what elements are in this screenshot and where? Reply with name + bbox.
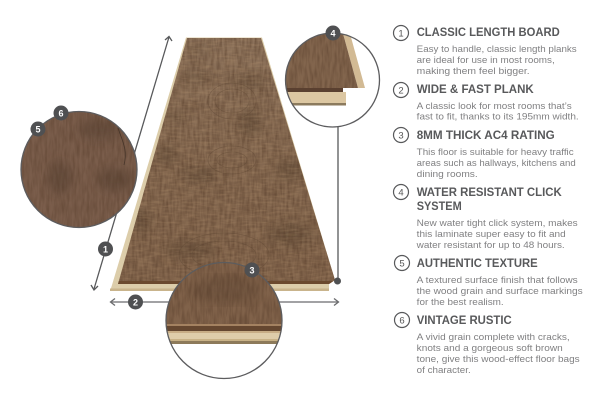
arrow 1: board length: [91, 36, 172, 290]
feature 4: water resistant click system: water resistant for up to 48 hours.: [416, 240, 565, 251]
feature 1: classic length board: 1: [398, 28, 404, 39]
feature 1: classic length board: making them feel bigger.: [417, 66, 530, 77]
feature 3: 8mm thick AC4 rating: 3: [398, 130, 404, 141]
feature 1: classic length board: [394, 25, 577, 77]
feature 6: vintage rustic: of character.: [417, 365, 471, 376]
feature 6: vintage rustic: knots and a gorgeous soft brown: [417, 343, 563, 354]
feature 4: water resistant click system: this laminate super easy to fit and: [417, 229, 566, 240]
badge 6: [54, 106, 68, 120]
feature 3: 8mm thick AC4 rating: This floor is suitable for heavy traffic: [417, 147, 574, 158]
wood top surface: [286, 34, 358, 88]
plank core edge: [110, 38, 335, 291]
tongue: [288, 92, 346, 103]
badge 4: [326, 26, 340, 40]
feature 6: vintage rustic: 6: [399, 315, 405, 326]
feature 5: authentic texture: for the best realism.: [417, 297, 504, 308]
feature 1: classic length board: are ideal for use in most rooms,: [417, 55, 555, 66]
feature 6: vintage rustic: A vivid grain complete with cracks,: [417, 332, 570, 343]
badge 5: [30, 122, 46, 136]
feature 3: 8mm thick AC4 rating: [394, 128, 576, 180]
badge 1: 1: [103, 244, 108, 254]
feature 2: wide and fast plank: fast to fit, thanks to its 195mm width.: [417, 112, 579, 122]
grain arcs: [179, 83, 269, 277]
feature 2: wide and fast plank: 2: [398, 85, 404, 96]
feature 4: water resistant click system: New water tight click system, makes: [417, 218, 578, 229]
badge 2: 2: [133, 297, 138, 307]
magnifier: texture detail: [20, 110, 138, 230]
feature 5: authentic texture: [394, 256, 583, 308]
feature 6: vintage rustic: [394, 312, 580, 376]
feature 5: authentic texture: 5: [399, 258, 405, 269]
leader line from click system to plank corner: [334, 127, 341, 284]
arrow 2: board width: [110, 298, 338, 306]
badge 6: 6: [58, 108, 64, 118]
feature 6: vintage rustic: VINTAGE RUSTIC: [417, 313, 512, 327]
laminate plank: [110, 36, 340, 291]
badge 5: 5: [35, 124, 41, 134]
badge 4: 4: [330, 28, 336, 38]
badge 3: 3: [249, 265, 255, 275]
feature 4: water resistant click system: 4: [398, 187, 404, 198]
feature 1: classic length board: CLASSIC LENGTH BOARD: [417, 25, 560, 39]
badge 1: [98, 242, 113, 256]
feature 1: classic length board: Easy to handle, classic length planks: [417, 44, 577, 55]
feature 5: authentic texture: the wood grain and surface markings: [417, 286, 583, 297]
feature 5: authentic texture: AUTHENTIC TEXTURE: [417, 256, 538, 270]
badge 3: [244, 262, 260, 278]
plank wood surface: [110, 36, 340, 286]
magnifier: board thickness detail: [165, 262, 283, 378]
feature 3: 8mm thick AC4 rating: 8MM THICK AC4 RATING: [417, 128, 555, 142]
feature 6: vintage rustic: tone, give this wood-effect floor bags: [417, 354, 580, 365]
feature 5: authentic texture: A textured surface finish that follows: [417, 275, 578, 286]
feature 4: water resistant click system: SYSTEM: [417, 199, 462, 213]
badge 2: [128, 294, 143, 310]
feature 2: wide and fast plank: WIDE & FAST PLANK: [417, 82, 534, 96]
feature 4: water resistant click system: [394, 184, 578, 251]
feature 2: wide and fast plank: A classic look for most rooms that’s: [417, 101, 572, 112]
feature 4: water resistant click system: WATER RESISTANT CLICK: [417, 185, 562, 199]
feature list: [394, 25, 583, 376]
groove shadow: [286, 88, 343, 92]
cream side of the top board: [344, 35, 365, 88]
feature 2: wide and fast plank: [394, 82, 579, 122]
feature 3: 8mm thick AC4 rating: areas such as hallways, kitchens and: [417, 158, 576, 169]
magnifier: click system detail: [280, 30, 380, 127]
feature 3: 8mm thick AC4 rating: dining rooms.: [417, 169, 478, 180]
